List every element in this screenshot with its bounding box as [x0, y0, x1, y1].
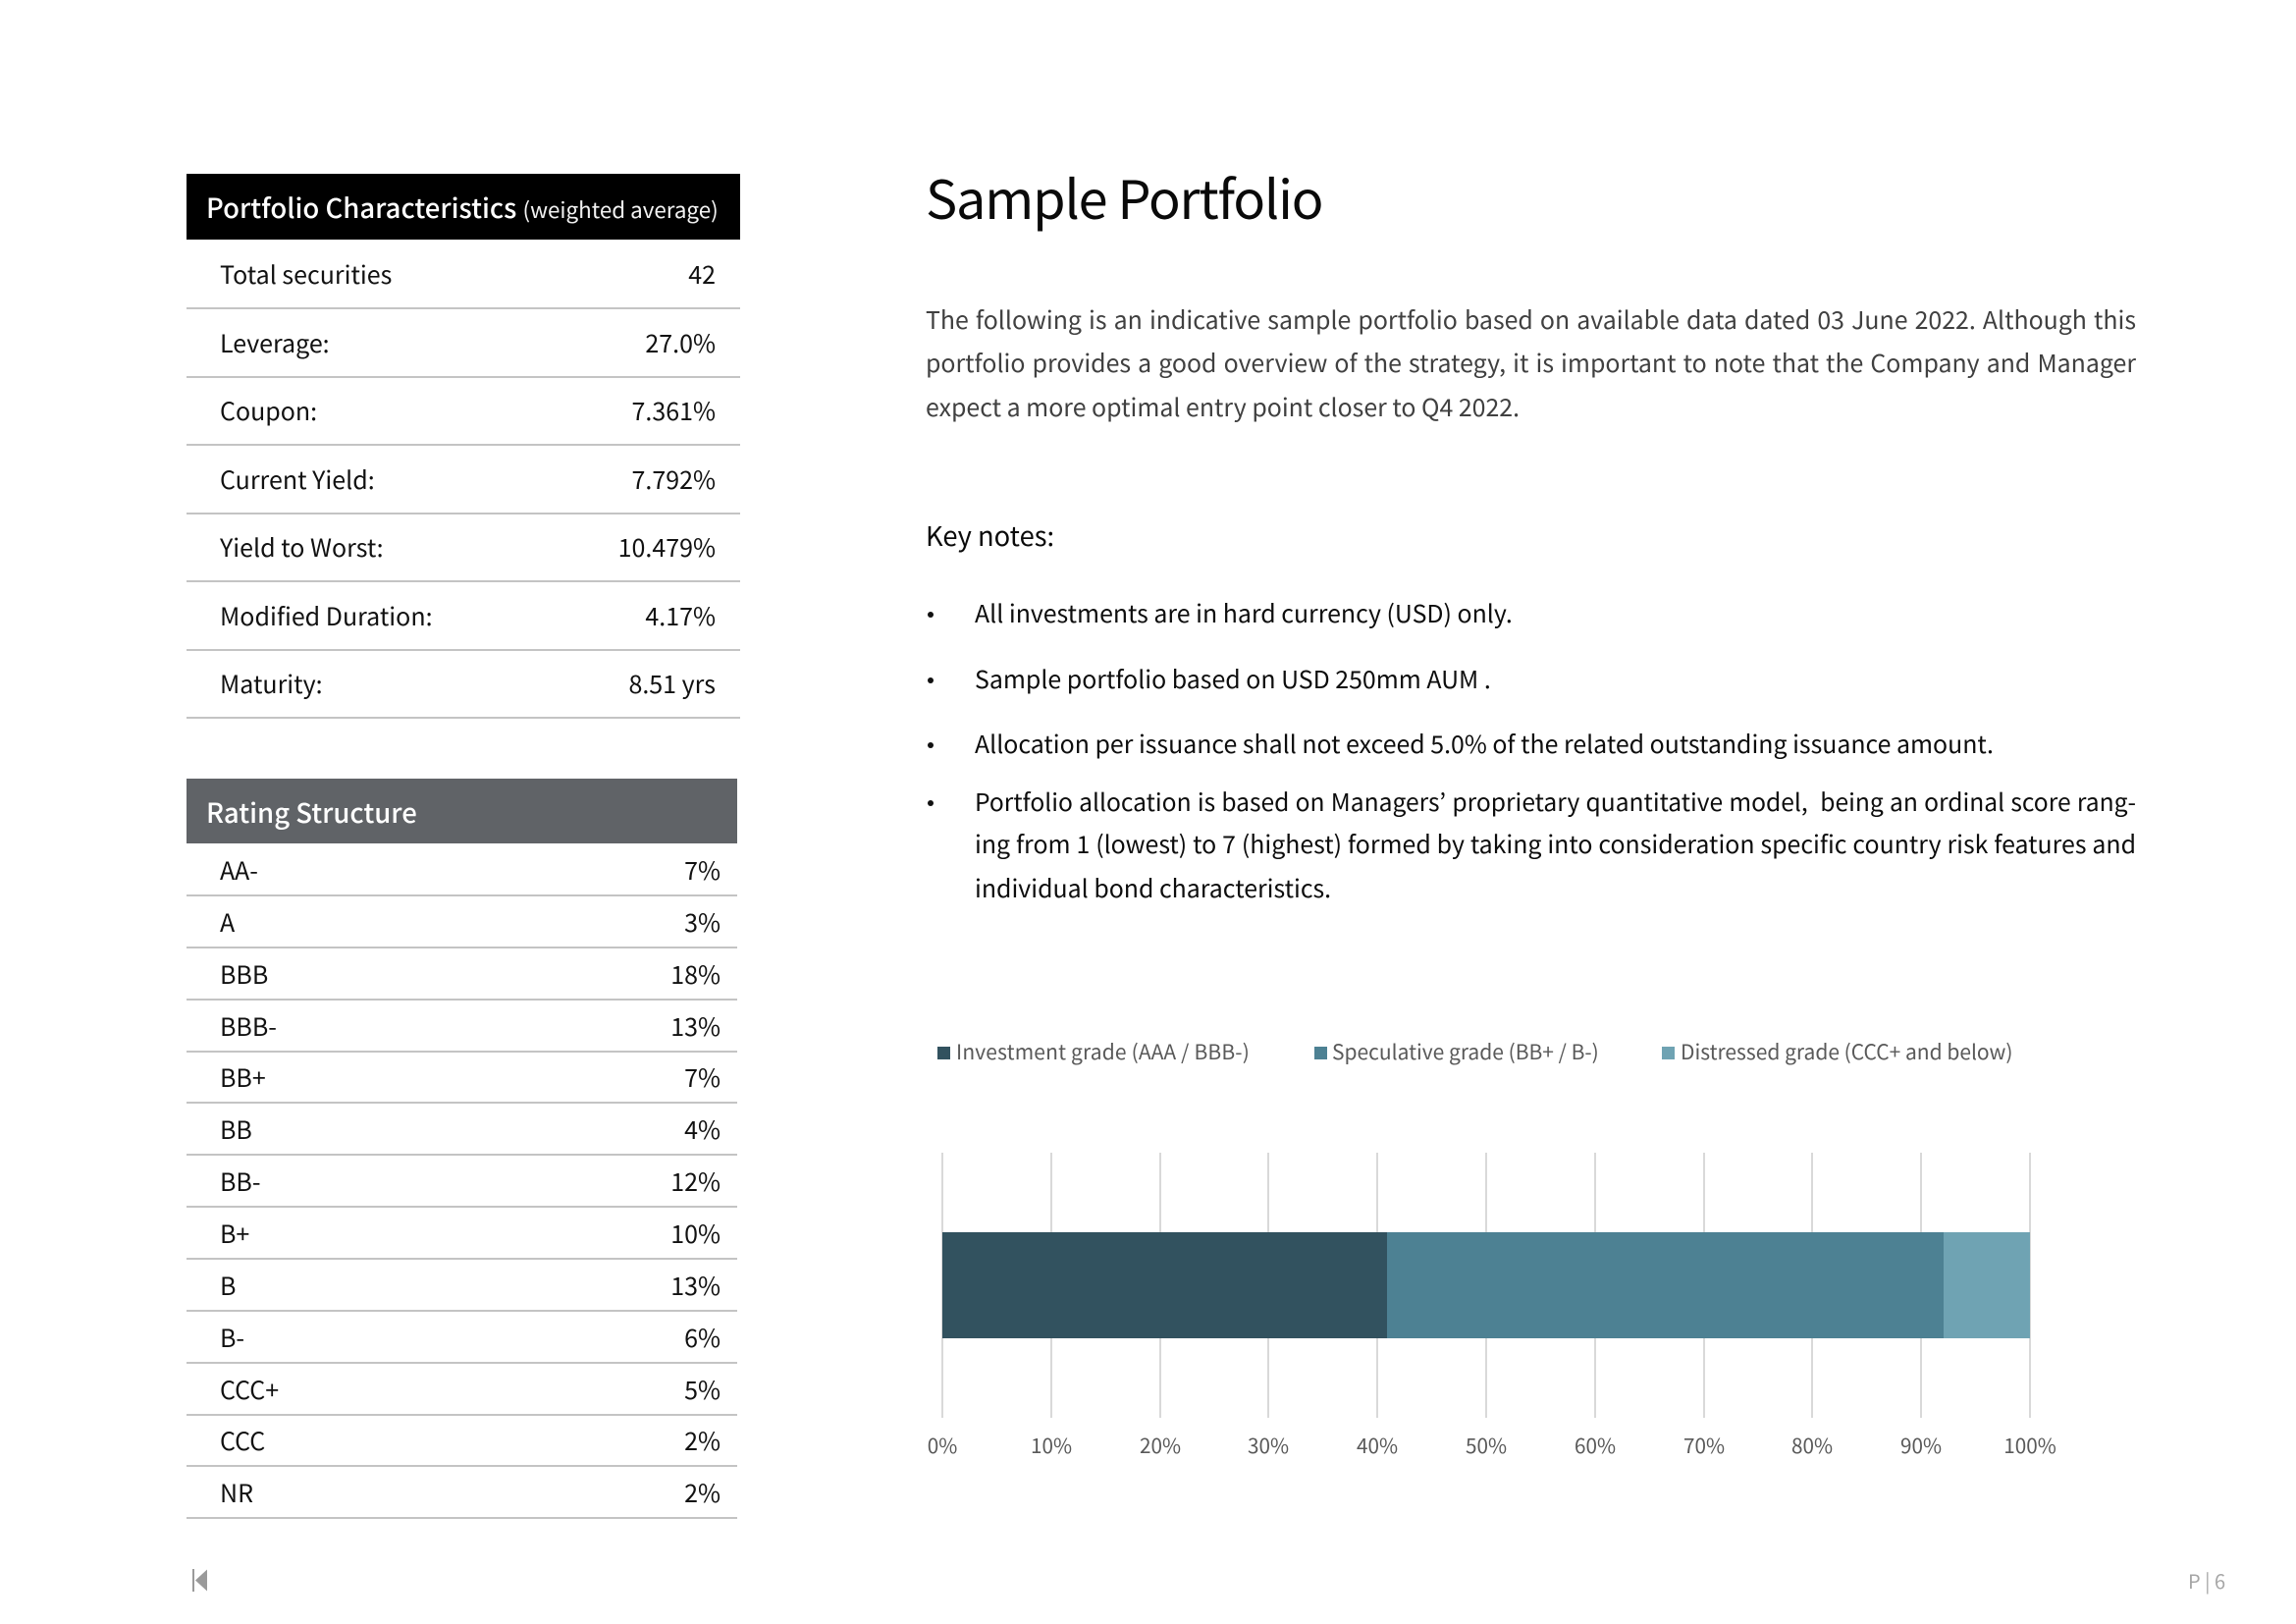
row: AA-: AA- — [220, 852, 258, 888]
icon: first page navigation arrow — [192, 1569, 207, 1592]
title: Sample Portfolio — [926, 157, 1322, 235]
row: BB — [187, 1104, 737, 1156]
row: BB-: BB- — [220, 1164, 261, 1199]
bar segment: speculative grade 51% — [1387, 1232, 1944, 1338]
bullet 3 — [928, 742, 934, 748]
row: BB: 4% — [684, 1111, 721, 1147]
row: coupon: Coupon: — [220, 393, 317, 428]
row: CCC — [187, 1415, 737, 1467]
intro line 3: expect a more optimal entry point closer to Q4 2022. — [926, 389, 1520, 424]
row: B-: 6% — [684, 1320, 721, 1355]
row: modified duration — [187, 581, 740, 650]
row: current yield: Current Yield: — [220, 461, 375, 497]
bullet 1 — [928, 612, 934, 618]
row: yield to worst — [187, 514, 740, 582]
axis label 20%: 20% — [1140, 1430, 1181, 1459]
row: A — [187, 896, 737, 948]
row: CCC+: 5% — [684, 1371, 721, 1406]
chart legend — [937, 1037, 2012, 1066]
panel: portfolio characteristics — [187, 174, 740, 719]
row: BBB — [187, 948, 737, 1001]
page number: P | 6 — [2188, 1566, 2225, 1595]
row: BBB: BBB — [220, 956, 268, 992]
row: BB+: 7% — [684, 1059, 721, 1095]
row: leverage: 27.0% — [645, 324, 716, 359]
row: NR — [187, 1467, 737, 1519]
row: leverage — [187, 308, 740, 377]
legend swatch: speculative grade — [1314, 1047, 1327, 1059]
legend label: distressed grade: Distressed grade (CCC+ and below) — [1681, 1037, 2012, 1066]
list: key notes bullets — [928, 595, 2136, 905]
row: B+: 10% — [670, 1216, 721, 1251]
row: yield to worst: Yield to Worst: — [220, 529, 384, 565]
row: B — [187, 1260, 737, 1312]
row: modified duration: Modified Duration: — [220, 597, 433, 632]
row: coupon: 7.361% — [632, 393, 716, 428]
row: A: A — [220, 904, 235, 940]
row: BBB: 18% — [670, 956, 721, 992]
row: CCC: CCC — [220, 1423, 265, 1458]
row: BB-: 12% — [670, 1164, 721, 1199]
row: CCC+: CCC+ — [220, 1371, 279, 1406]
row: B: B — [220, 1268, 236, 1303]
intro line 1: The following is an indicative sample portfolio based on available data dated 03 June 2022. Although this — [926, 301, 2136, 337]
intro line 2: portfolio provides a good overview of the strategy, it is important to note that the Company and Manager — [926, 345, 2136, 380]
bullet 4 — [928, 800, 934, 806]
row: BB+: BB+ — [220, 1059, 266, 1095]
legend label: investment grade: Investment grade (AAA / BBB-) — [956, 1037, 1250, 1066]
row: leverage: Leverage: — [220, 324, 330, 359]
legend swatch: distressed grade — [1662, 1047, 1675, 1059]
heading: rating structure — [187, 779, 737, 843]
row: total securities — [187, 241, 740, 309]
row: yield to worst: 10.479% — [618, 529, 716, 565]
row: B+: B+ — [220, 1216, 249, 1251]
text block: intro paragraph — [926, 301, 2136, 424]
heading: portfolio characteristics — [187, 174, 740, 240]
heading: key notes: Key notes: — [926, 514, 1054, 554]
row: B: 13% — [670, 1268, 721, 1303]
bullet 2 — [928, 677, 934, 683]
row: A: 3% — [684, 904, 721, 940]
row: maturity: Maturity: — [220, 666, 323, 701]
panel: rating structure — [187, 779, 737, 1519]
axis label 100%: 100% — [2003, 1430, 2056, 1459]
stacked bar chart — [928, 1153, 2056, 1459]
row: coupon — [187, 377, 740, 446]
row: CCC+ — [187, 1363, 737, 1416]
row: BBB-: 13% — [670, 1008, 721, 1044]
axis label 50%: 50% — [1466, 1430, 1507, 1459]
row: maturity: 8.51 yrs — [628, 666, 716, 701]
row: total securities: 42 — [688, 256, 716, 292]
row: AA-: 7% — [684, 852, 721, 888]
row: B-: B- — [220, 1320, 244, 1355]
row: NR: 2% — [684, 1475, 721, 1510]
row: BBB- — [187, 1001, 737, 1053]
axis label 70%: 70% — [1683, 1430, 1725, 1459]
note 3: Allocation per issuance shall not exceed 5.0% of the related outstanding issuance amount. — [975, 726, 1994, 761]
axis label 40%: 40% — [1357, 1430, 1398, 1459]
axis label 60%: 60% — [1575, 1430, 1616, 1459]
row: BBB-: BBB- — [220, 1008, 277, 1044]
row: total securities: Total securities — [220, 256, 392, 292]
axis label 80%: 80% — [1791, 1430, 1833, 1459]
row: B+ — [187, 1208, 737, 1260]
note 4 line 1: Portfolio allocation is based on Managers’ proprietary quantitative model, being an ordinal score rang- — [975, 784, 2136, 819]
row: AA- — [187, 844, 737, 896]
note 4 line 3: individual bond characteristics. — [975, 870, 1331, 905]
axis label 30%: 30% — [1248, 1430, 1289, 1459]
row: BB: BB — [220, 1111, 252, 1147]
bar segment: investment grade 41% — [942, 1232, 1387, 1338]
row: maturity — [187, 650, 740, 719]
row: BB- — [187, 1156, 737, 1208]
axis label 90%: 90% — [1900, 1430, 1942, 1459]
row: CCC: 2% — [684, 1423, 721, 1458]
row: current yield — [187, 446, 740, 514]
note 4 line 2: ing from 1 (lowest) to 7 (highest) formed by taking into consideration specific country risk features and — [975, 826, 2136, 861]
row: BB+ — [187, 1052, 737, 1104]
axis label 0%: 0% — [928, 1430, 957, 1459]
row: B- — [187, 1312, 737, 1364]
axis label 10%: 10% — [1031, 1430, 1072, 1459]
bar segment: distressed grade 8% — [1944, 1232, 2030, 1338]
legend swatch: investment grade — [937, 1047, 950, 1059]
heading: rating structure: Rating Structure — [206, 791, 417, 831]
row: current yield: 7.792% — [632, 461, 716, 497]
row: modified duration: 4.17% — [645, 597, 716, 632]
row: NR: NR — [220, 1475, 253, 1510]
heading: portfolio characteristics: Portfolio Characteristics (weighted average) — [206, 187, 719, 226]
note 2: Sample portfolio based on USD 250mm AUM . — [975, 660, 1491, 695]
note 1: All investments are in hard currency (USD) only. — [975, 595, 1513, 630]
legend label: speculative grade: Speculative grade (BB+ / B-) — [1332, 1037, 1599, 1066]
